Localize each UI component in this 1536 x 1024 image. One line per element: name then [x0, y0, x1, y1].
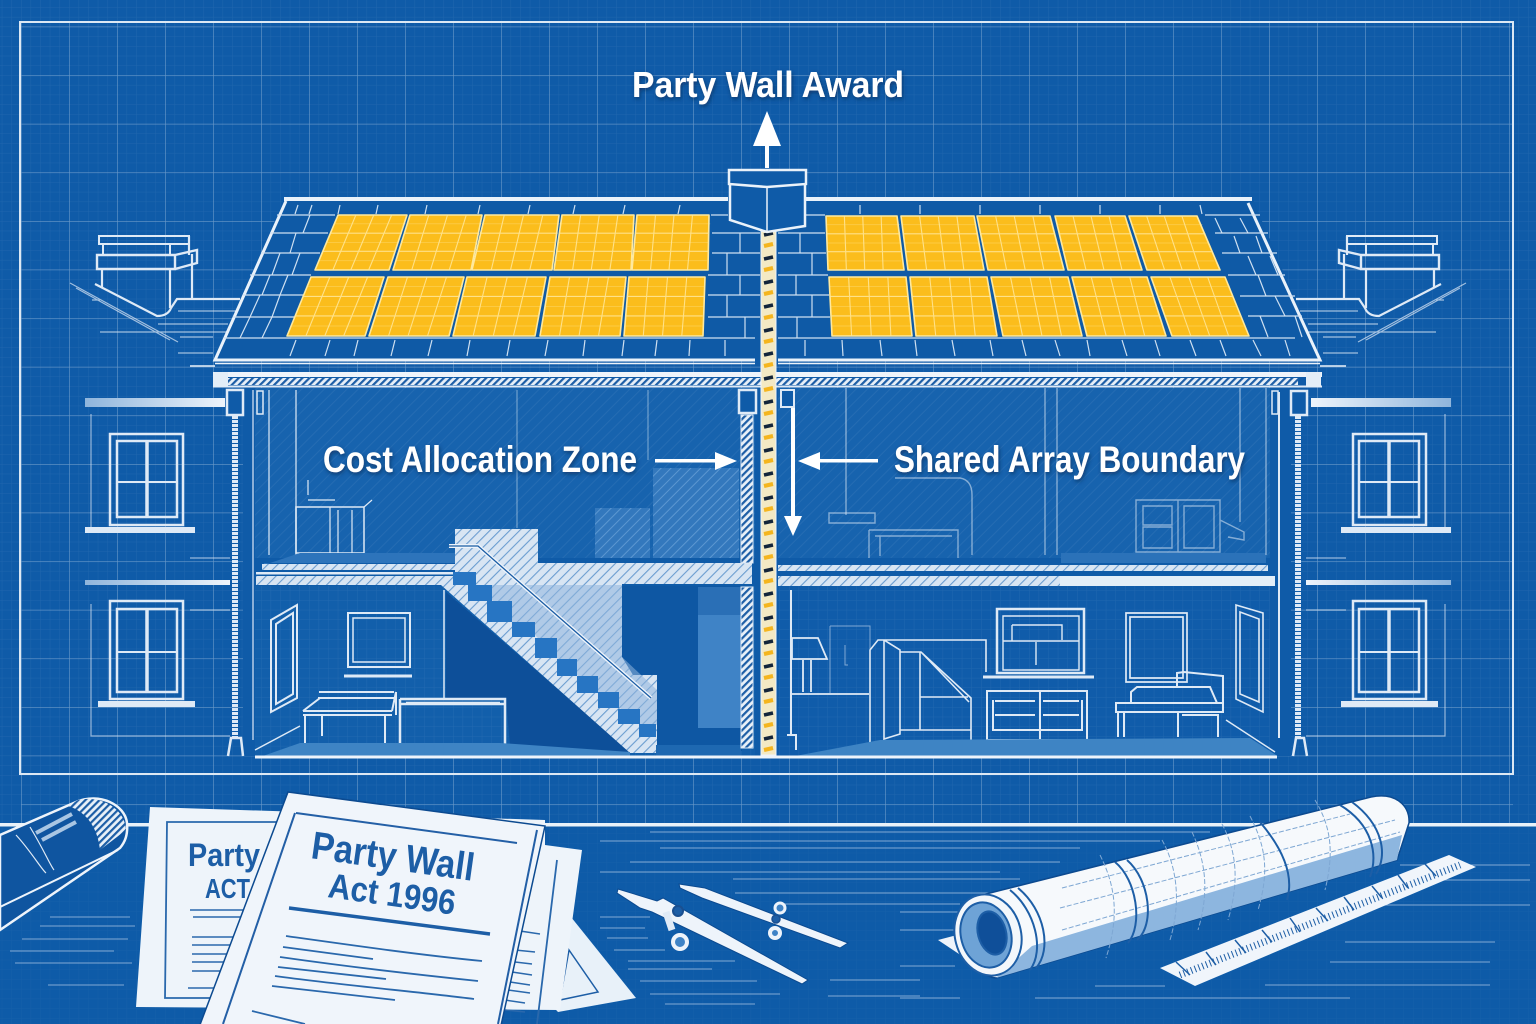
right upper room furnishings	[829, 388, 1266, 558]
document: party wall act 1996	[198, 792, 545, 1024]
solar array: right roof	[826, 216, 1249, 336]
left wing with window and chimney	[70, 236, 240, 736]
back sheet subtitle: ACT	[205, 873, 250, 904]
icon: ruler	[1160, 855, 1476, 986]
eave band	[213, 372, 1322, 387]
document title: Party Wall	[309, 824, 477, 890]
floor slab between storeys	[256, 553, 1275, 586]
right wing with window and chimney	[1296, 236, 1466, 736]
right lower room furnishings	[787, 590, 1275, 752]
icon: rolled tube	[0, 799, 127, 930]
outer walls and posts	[227, 390, 1307, 756]
desk surface with streak lines	[0, 823, 1536, 1024]
party wall strip with yellow and black marks	[761, 230, 776, 755]
document: back sheet	[136, 807, 636, 1024]
house section	[190, 170, 1346, 758]
back sheet title: Party	[188, 837, 260, 873]
label: shared array boundary: Shared Array Boundary	[894, 439, 1245, 480]
heading: party wall award: Party Wall Award	[632, 64, 904, 105]
party wall hatched section	[739, 390, 794, 748]
document subtitle: Act 1996	[326, 866, 458, 923]
arrow: cost allocation zone	[655, 452, 737, 470]
staircase	[441, 529, 742, 753]
roof	[190, 197, 1346, 366]
interior background	[243, 388, 1291, 756]
arrow: shared array boundary	[798, 452, 878, 470]
solar array: left roof	[287, 215, 711, 336]
central chimney	[729, 170, 806, 232]
left lower room furnishings	[255, 590, 505, 750]
arrow: downward dimension	[784, 408, 802, 536]
arrow: up to party wall award	[753, 111, 781, 168]
icon: drafting compass	[617, 884, 848, 984]
label: cost allocation zone: Cost Allocation Zone	[323, 439, 637, 480]
ground floor strip	[255, 738, 1277, 758]
left upper room furnishings	[253, 390, 739, 740]
icon: rolled blueprint	[938, 796, 1409, 983]
